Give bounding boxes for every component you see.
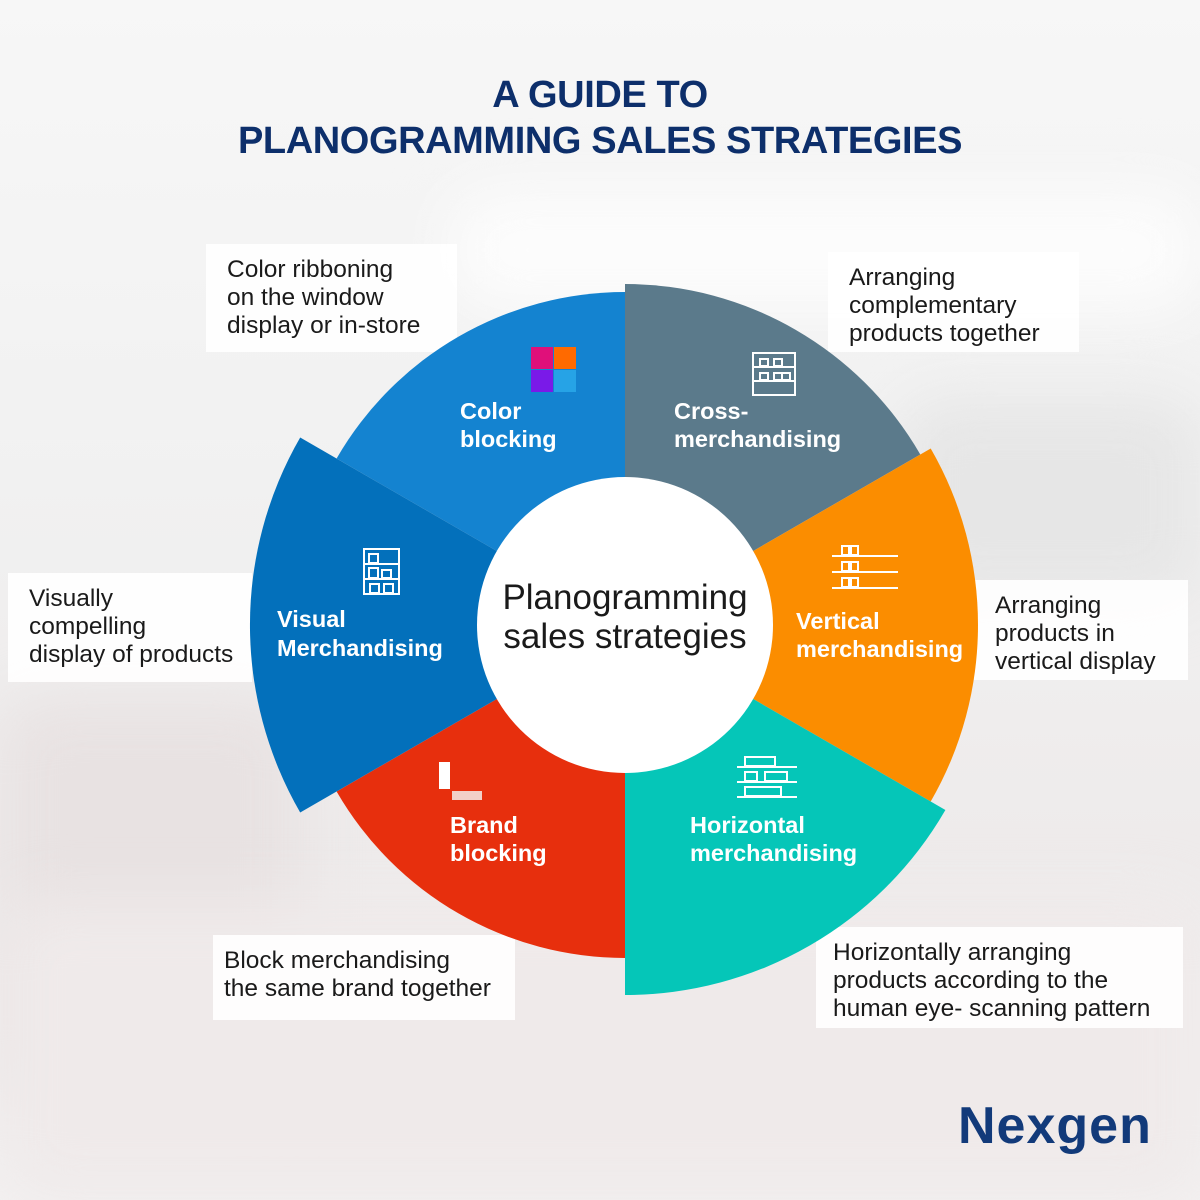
title: PLANOGRAMMING SALES STRATEGIES	[238, 120, 962, 162]
segment: color blocking	[337, 292, 625, 625]
segment: vertical merchandising: Vertical	[796, 608, 880, 634]
segment: color blocking: blocking	[460, 426, 557, 452]
segment: brand blocking: blocking	[450, 840, 547, 866]
callout: vertical merchandising: products in	[995, 620, 1115, 647]
callout: brand blocking	[213, 935, 515, 1020]
segment: cross-merchandising: Cross-	[674, 398, 748, 424]
segment: vertical merchandising	[625, 448, 978, 802]
callout: vertical merchandising: Arranging	[995, 592, 1101, 619]
segment: color blocking: Color	[460, 398, 521, 424]
title	[238, 74, 962, 162]
callout: color blocking: Color ribboning	[227, 256, 393, 283]
segment: horizontal merchandising	[625, 625, 945, 995]
icon: vertical shelves	[832, 546, 898, 588]
segment: cross-merchandising: merchandising	[674, 426, 841, 452]
center circle: Planogramming	[502, 578, 748, 617]
callout: horizontal merchandising: products according to the	[833, 967, 1108, 994]
callout: cross merchandising: products together	[849, 320, 1040, 347]
segment: visual merchandising: Visual	[277, 606, 346, 632]
segment: vertical merchandising: merchandising	[796, 636, 963, 662]
callout: visual merchandising: Visually	[29, 585, 113, 612]
callout: color blocking	[206, 244, 457, 352]
callout: brand blocking: the same brand together	[224, 975, 491, 1002]
segment: visual merchandising	[250, 438, 625, 812]
title: A GUIDE TO	[492, 74, 708, 116]
icon: display cabinet	[364, 549, 399, 594]
callout: visual merchandising: compelling	[29, 613, 146, 640]
segment: cross-merchandising	[625, 284, 920, 625]
callout: color blocking: display or in-store	[227, 312, 420, 339]
callout: brand blocking: Block merchandising	[224, 947, 450, 974]
center circle	[477, 477, 773, 773]
callout: horizontal merchandising	[816, 927, 1183, 1028]
callout: horizontal merchandising: human eye- scanning pattern	[833, 995, 1150, 1022]
callout: vertical merchandising: vertical display	[995, 648, 1156, 675]
callout: color blocking: on the window	[227, 284, 384, 311]
callout: visual merchandising: display of products	[29, 641, 233, 668]
icon: horizontal shelves	[737, 757, 797, 797]
icon: color squares	[531, 347, 576, 392]
callout: horizontal merchandising: Horizontally arranging	[833, 939, 1071, 966]
segment: horizontal merchandising: Horizontal	[690, 812, 805, 838]
center circle: sales strategies	[503, 617, 747, 656]
callout: cross merchandising: Arranging	[849, 264, 955, 291]
icon: shelf	[753, 353, 795, 395]
segment: brand blocking: Brand	[450, 812, 518, 838]
segment: horizontal merchandising: merchandising	[690, 840, 857, 866]
callout: cross merchandising: complementary	[849, 292, 1016, 319]
callout: cross merchandising	[828, 252, 1079, 352]
segment: brand blocking	[337, 625, 625, 958]
callout: visual merchandising	[8, 573, 252, 682]
icon: brand block	[439, 762, 482, 800]
logo: Nexgen	[958, 1097, 1152, 1155]
segment: visual merchandising: Merchandising	[277, 635, 443, 661]
callout: vertical merchandising	[974, 580, 1188, 680]
